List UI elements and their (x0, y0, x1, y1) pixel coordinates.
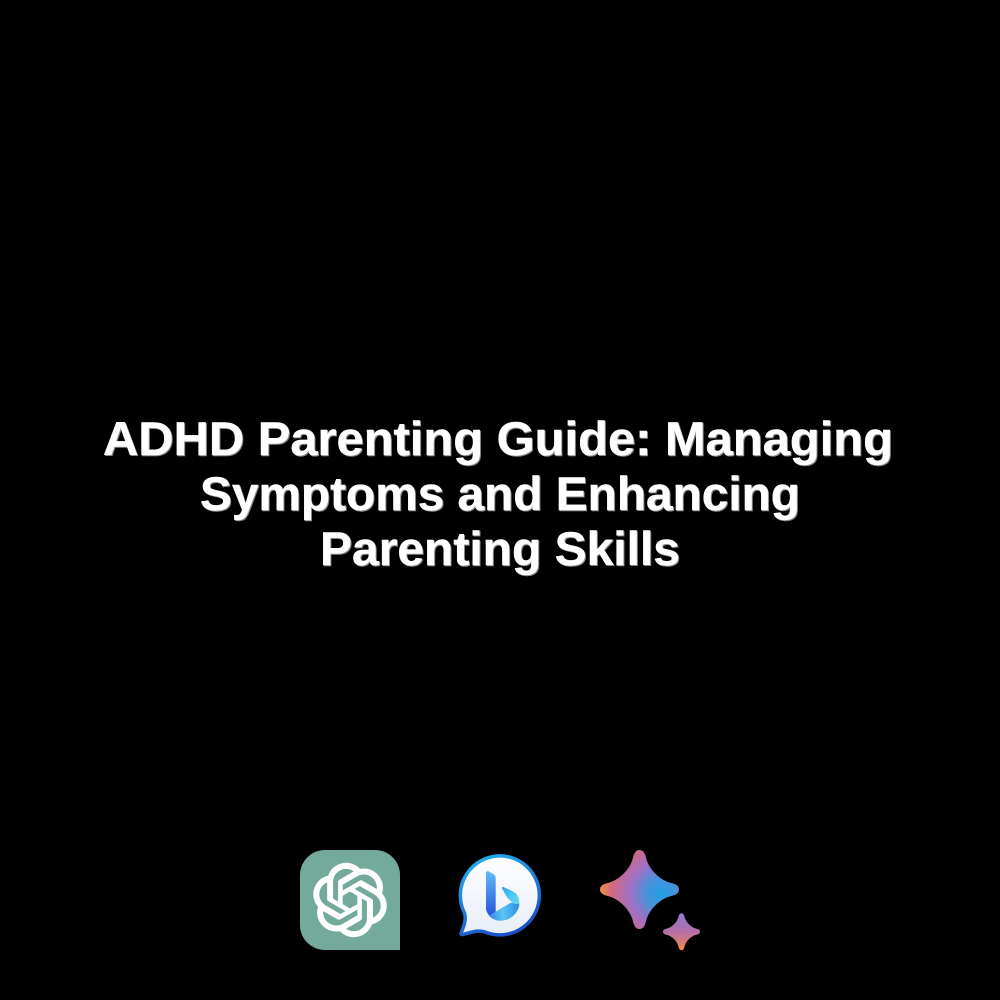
icon: Bing chat bubble (460, 856, 539, 935)
title: ADHD Parenting Guide: Managing (103, 412, 893, 465)
icon: Gemini sparkles (600, 850, 700, 950)
title: Parenting Skills (320, 522, 680, 575)
title (103, 412, 893, 575)
icon: small sparkle (663, 913, 700, 950)
title: Symptoms and Enhancing (200, 467, 800, 520)
icon: ChatGPT logo (300, 850, 400, 950)
icon: large sparkle (600, 850, 679, 929)
